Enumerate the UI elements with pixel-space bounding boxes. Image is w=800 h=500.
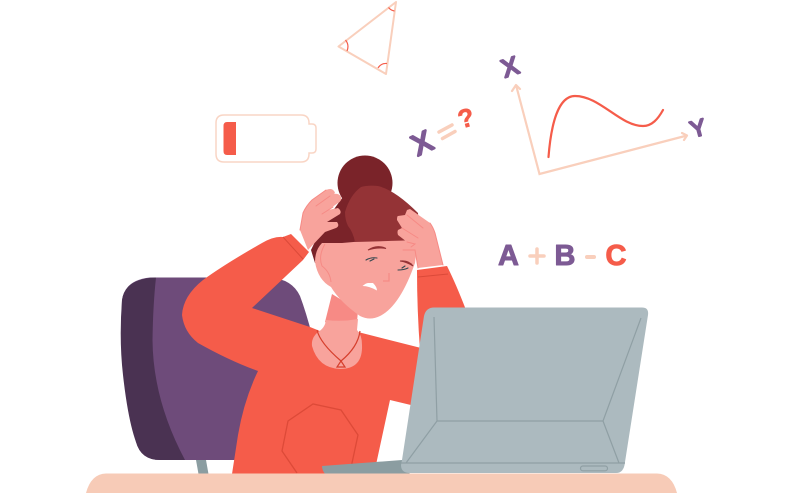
lid lines — [401, 317, 641, 463]
icon: triangle with angle marks — [338, 2, 396, 74]
equation: X = ?: ? — [454, 101, 478, 135]
cuff lines — [283, 237, 448, 277]
hair bun — [338, 156, 392, 210]
icon: low battery — [216, 115, 316, 162]
axis label Y: Y — [687, 113, 709, 143]
shirt pocket outline — [282, 404, 358, 473]
equation: A + B - C — [498, 240, 627, 272]
chart: axes with curve — [512, 85, 687, 174]
nose — [383, 273, 389, 281]
face — [315, 236, 418, 318]
equation: A + B - C: B — [555, 240, 575, 272]
necklace — [317, 330, 360, 367]
lid and base — [401, 308, 648, 473]
back hair — [311, 197, 356, 263]
shirt and raised arm — [182, 234, 425, 474]
right hand — [397, 209, 443, 268]
sleeve: right arm — [417, 266, 466, 350]
front hair — [345, 186, 420, 242]
equation: X = ? — [407, 101, 478, 162]
person — [182, 156, 466, 474]
ear detail — [321, 244, 331, 282]
slot — [580, 466, 608, 471]
keyboard deck — [322, 460, 410, 474]
mouth — [362, 283, 377, 290]
equation: A + B - C: A — [498, 240, 519, 272]
chair — [121, 278, 312, 474]
desk — [86, 474, 677, 493]
eyes and brows — [366, 247, 413, 270]
left hand — [300, 189, 341, 250]
axis label X: X — [498, 51, 523, 83]
equation: A + B - C: C — [606, 240, 627, 272]
neck — [325, 294, 358, 331]
equation: X = ?: X — [407, 125, 438, 162]
laptop — [322, 308, 648, 474]
